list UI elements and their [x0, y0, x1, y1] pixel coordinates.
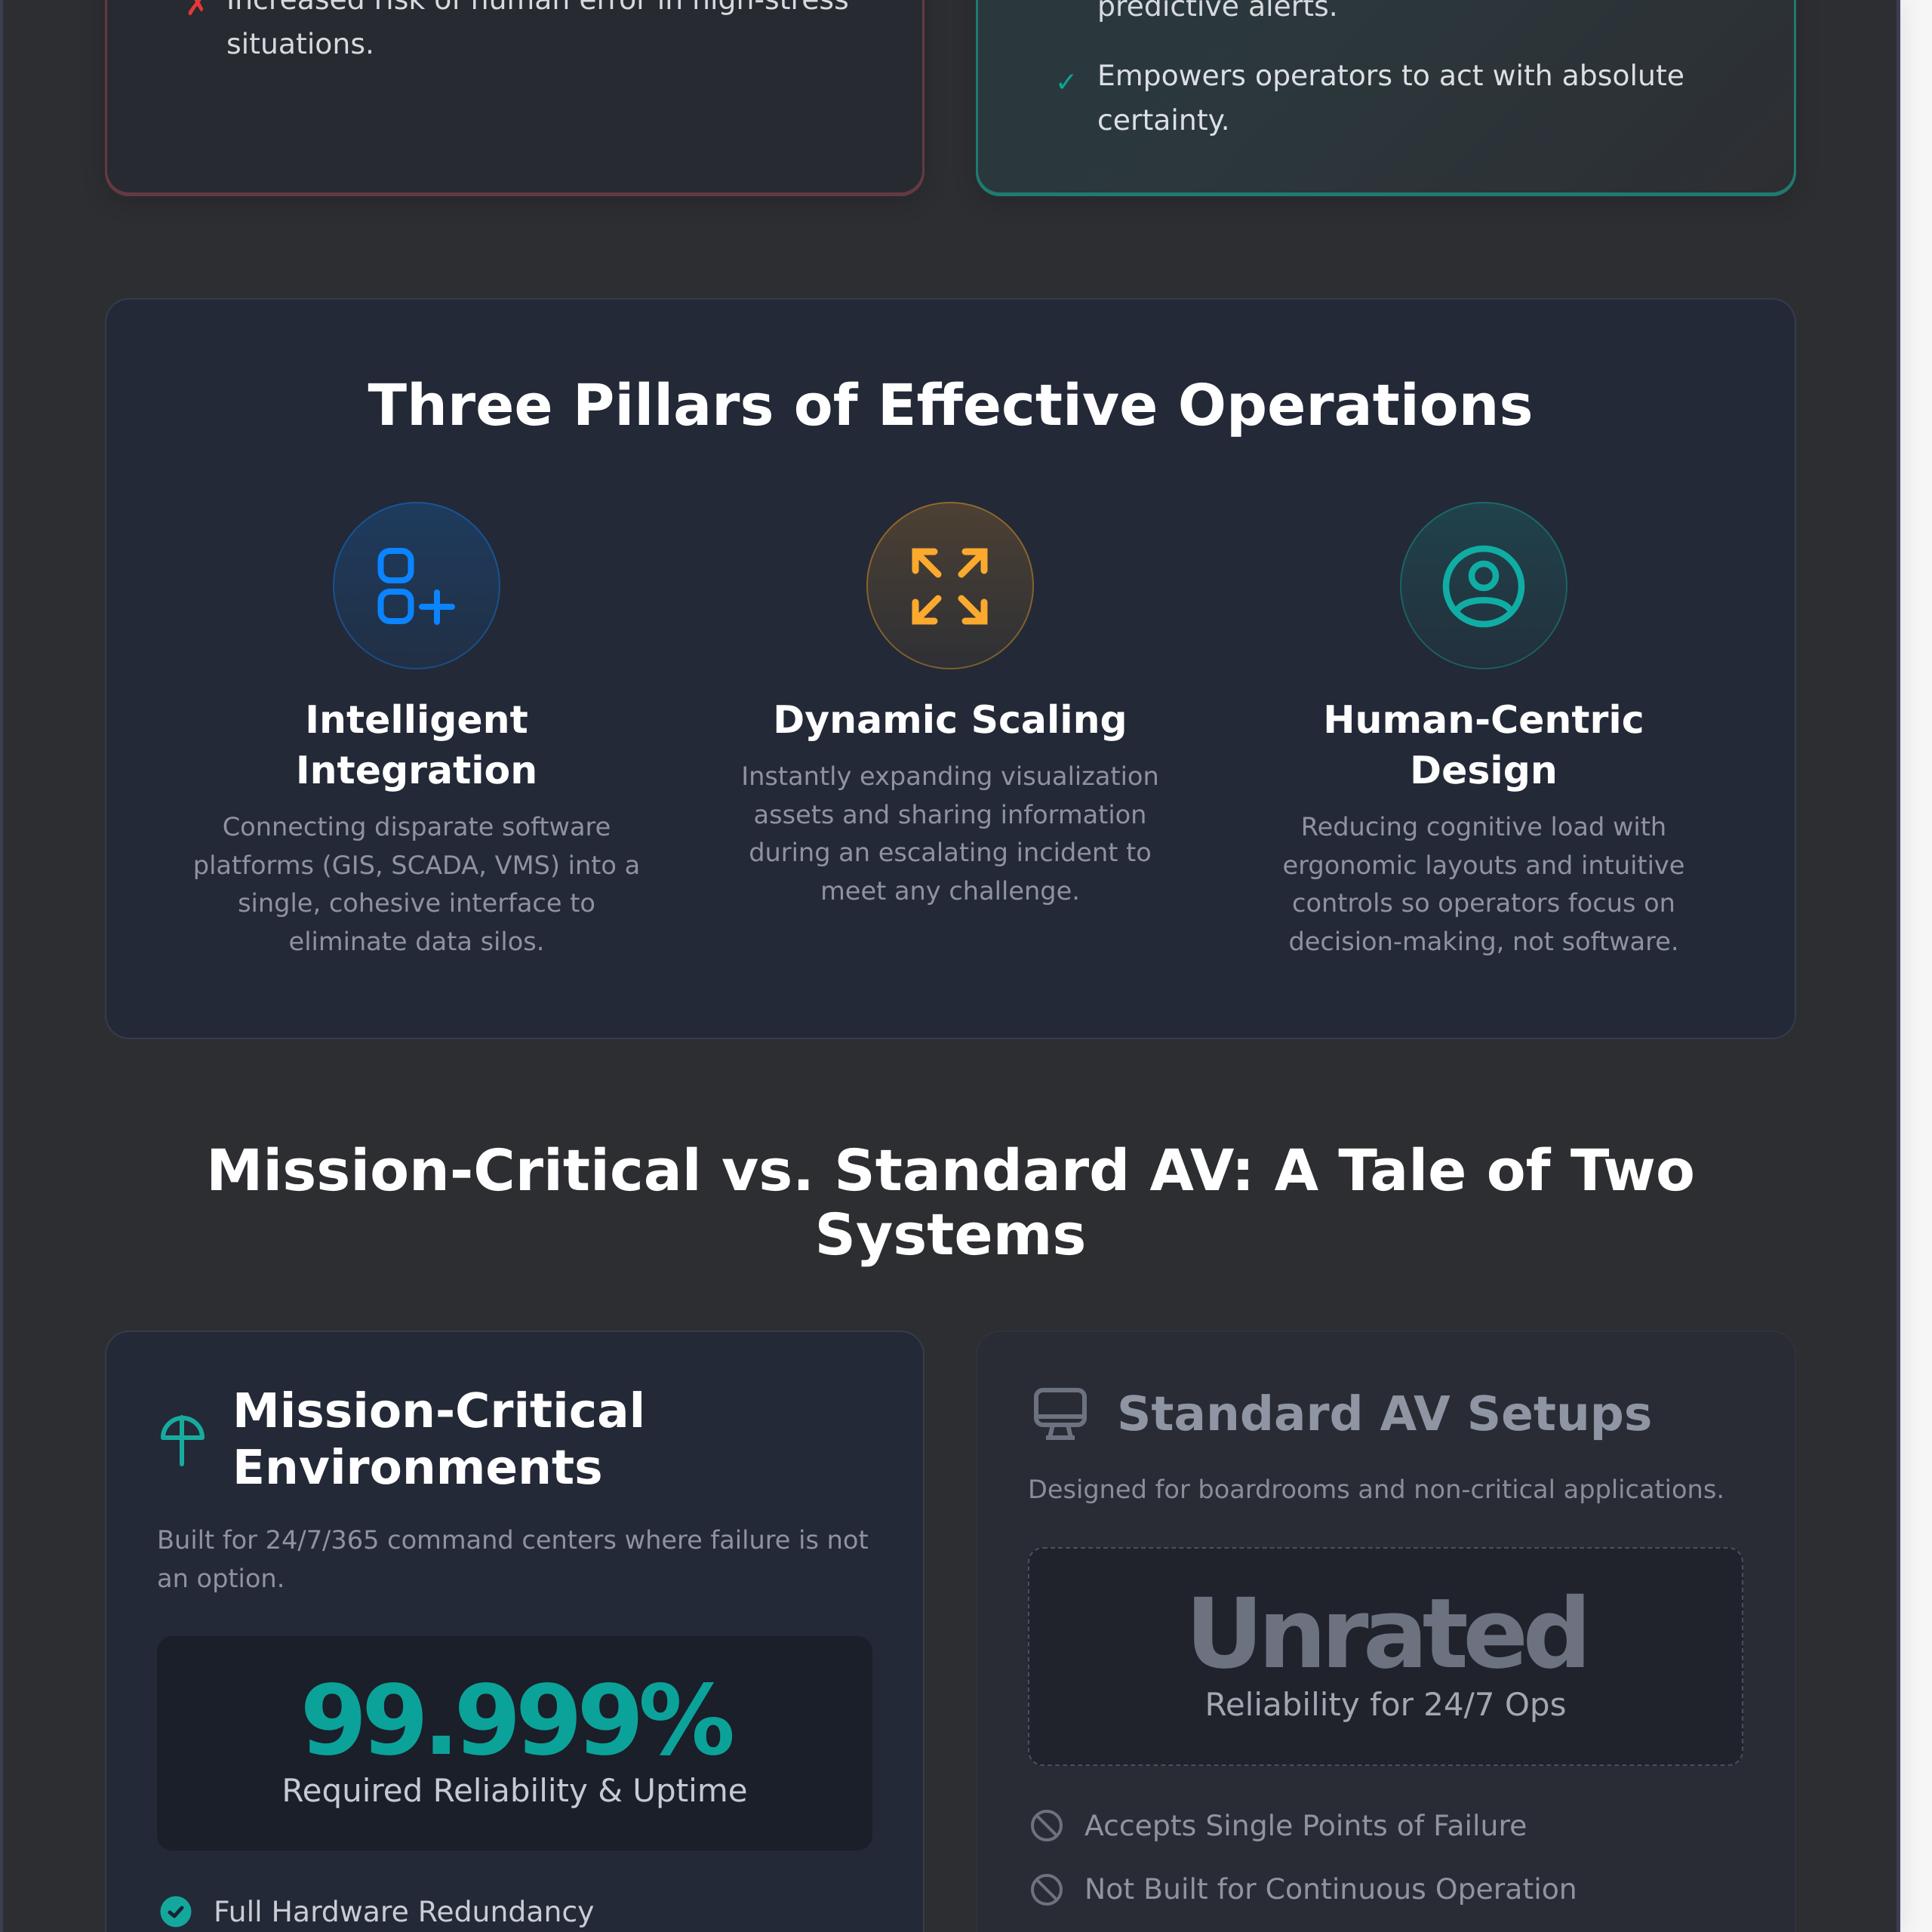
heading: human-centric design: Design: [1410, 748, 1558, 792]
icon: prohibited: [1031, 1810, 1063, 1841]
text: mission description: an option.: [157, 1564, 285, 1592]
text: integration description: [193, 812, 640, 955]
text: single points of failure: Accepts Single Points of Failure: [1084, 1809, 1527, 1842]
pillar: dynamic scaling: [741, 502, 1159, 906]
heading: intelligent integration: Intelligent: [305, 697, 528, 742]
list item: not continuous: [1031, 1872, 1577, 1906]
text: human error risk: [226, 0, 849, 60]
heading: human-centric design: [1323, 697, 1644, 792]
icon: user circle: [1400, 502, 1567, 669]
heading: human-centric design: Human-Centric: [1323, 697, 1644, 742]
heading: dynamic scaling: Dynamic Scaling: [773, 697, 1128, 742]
list item: single points of failure: [1031, 1809, 1527, 1842]
text: scaling description: during an escalating incident to: [749, 838, 1152, 867]
stat label: Required Reliability & Uptime: [281, 1772, 748, 1809]
text: empowers operators: certainty.: [1097, 103, 1230, 136]
text: integration description: platforms (GIS, SCADA, VMS) into a: [193, 850, 640, 880]
heading: intelligent integration: [296, 697, 537, 792]
text: scaling description: Instantly expanding visualization: [741, 761, 1159, 791]
stat value: Unrated: [1185, 1578, 1586, 1690]
text: human-centric description: ergonomic layouts and intuitive: [1283, 850, 1684, 880]
text: scaling description: assets and sharing information: [754, 800, 1146, 829]
stat label: Reliability for 24/7 Ops: [1205, 1686, 1566, 1723]
panel: unified solution: [976, 0, 1796, 196]
heading: three pillars: Three Pillars of Effective Operations: [368, 372, 1534, 438]
panel: standard av setups: [976, 1331, 1796, 1932]
icon: check badge: [160, 1896, 192, 1927]
icon: green check: ✓: [1055, 67, 1078, 98]
text: integration description: Connecting disparate software: [223, 812, 611, 841]
heading: mission-critical vs standard: Systems: [815, 1201, 1086, 1268]
text: not continuous: Not Built for Continuous Operation: [1084, 1872, 1577, 1906]
heading: mission-critical environments: Environments: [232, 1440, 603, 1495]
stat box: required uptime: [157, 1636, 872, 1850]
left edge stripe: [0, 0, 3, 1932]
text: empowers operators: Empowers operators to act with absolute: [1097, 59, 1684, 92]
heading: intelligent integration: Integration: [296, 748, 537, 792]
panel: mission-critical environments: [105, 1331, 924, 1932]
text: scaling description: meet any challenge.: [820, 875, 1080, 906]
icon: umbrella: [161, 1415, 205, 1466]
heading: mission-critical environments: [232, 1383, 645, 1495]
panel: three pillars: [105, 298, 1796, 1039]
stat box: unrated: [1028, 1547, 1743, 1766]
text: human-centric description: [1283, 812, 1684, 955]
text: integration description: single, cohesive interface to: [238, 888, 595, 918]
stat value: 99.999%: [300, 1665, 729, 1777]
list item: hardware redundancy: [160, 1895, 595, 1928]
heading: mission-critical vs standard: [206, 1137, 1695, 1268]
text: human-centric description: Reducing cognitive load with: [1301, 812, 1666, 841]
text: mission description: [157, 1525, 869, 1592]
icon: prohibited: [1031, 1874, 1063, 1906]
pillar: intelligent integration: [193, 502, 640, 955]
panel: current challenges: [105, 0, 924, 196]
text: standard description: Designed for boardrooms and non-critical applications.: [1028, 1475, 1724, 1504]
text: human error risk: situations.: [226, 27, 374, 60]
pillar: human-centric design: [1283, 502, 1684, 955]
icon: scaling arrows: [866, 502, 1034, 669]
text: empowers operators: [1097, 59, 1684, 136]
text: integration description: eliminate data silos.: [289, 927, 544, 955]
heading: standard av setups: Standard AV Setups: [1117, 1386, 1652, 1441]
text: scaling description: [741, 761, 1159, 906]
text: hardware redundancy: Full Hardware Redundancy: [214, 1895, 595, 1928]
heading: mission-critical environments: Mission-Critical: [232, 1383, 645, 1438]
heading: mission-critical vs standard: Mission-Critical vs. Standard AV: A Tale of Two: [206, 1137, 1695, 1204]
icon: monitor: [1034, 1388, 1087, 1440]
icon: integration: [333, 502, 500, 669]
text: human-centric description: controls so operators focus on: [1292, 888, 1675, 918]
text: mission description: Built for 24/7/365 command centers where failure is not: [157, 1525, 869, 1555]
text: human-centric description: decision-making, not software.: [1288, 927, 1679, 955]
right edge stripe: [1897, 0, 1900, 1932]
